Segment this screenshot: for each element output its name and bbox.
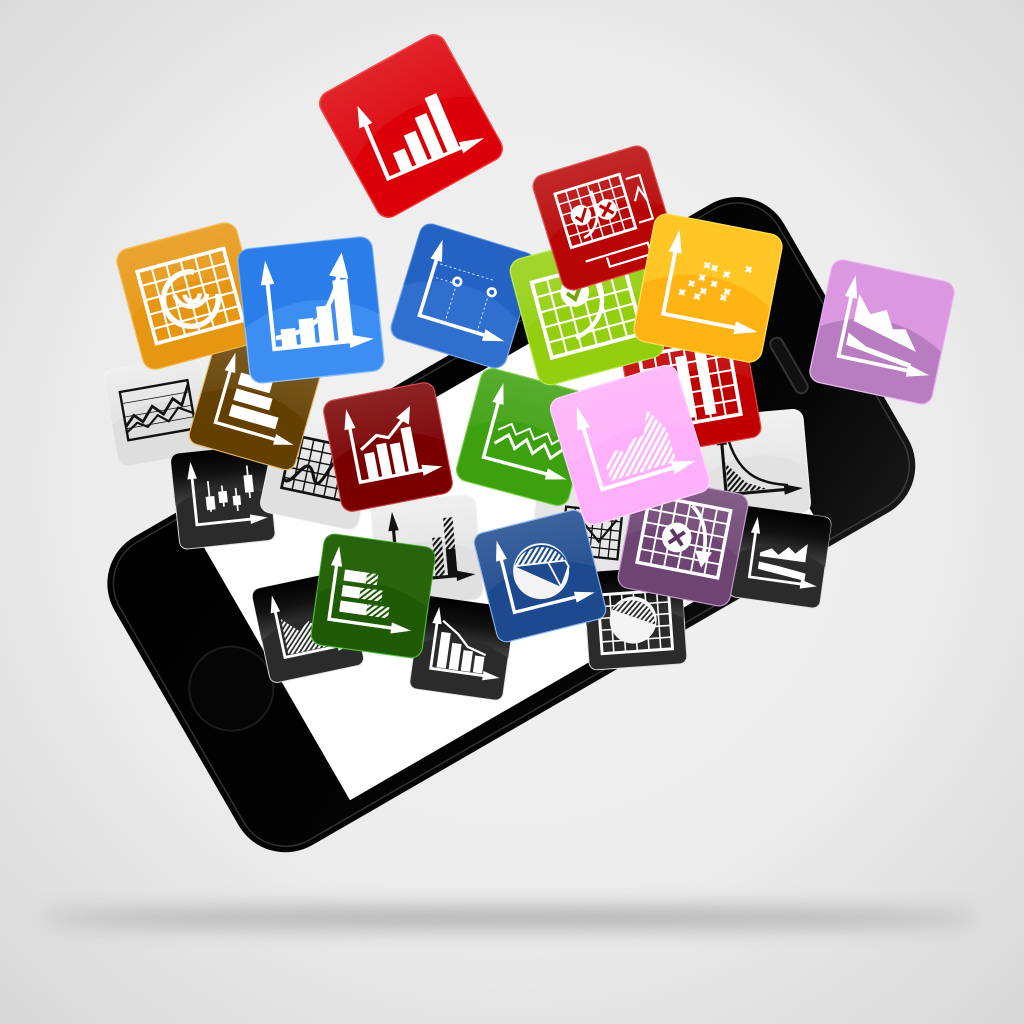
- chart: hatched area: [267, 581, 356, 663]
- phone: [88, 177, 935, 872]
- icon: white bar chart: [370, 494, 484, 608]
- chart: zigzag lines: [476, 382, 586, 485]
- chart: two area bands: [831, 274, 946, 381]
- icon: pink hatched area chart: [548, 363, 712, 527]
- chart: candlesticks: [186, 454, 268, 530]
- home button: [174, 631, 289, 746]
- chart: scatter crosses: [656, 228, 774, 338]
- chart: secondary grids: [566, 175, 663, 273]
- icon: white line chart: [102, 354, 216, 468]
- icon: blue two-point chart: [388, 221, 538, 371]
- chart: check mark on grid: [532, 258, 642, 358]
- chart: grid lines: [561, 507, 622, 559]
- chart: decay curve: [715, 420, 803, 500]
- chart: declining bars: [425, 606, 508, 683]
- icon: red bar chart top: [315, 30, 507, 222]
- phone edge highlight: [96, 185, 927, 864]
- chart: bars and curve: [258, 250, 374, 357]
- icon: white wave chart: [259, 413, 377, 531]
- chart: pie with hatched slice: [491, 521, 596, 619]
- chart: two area bands: [744, 516, 825, 591]
- icon: green zigzag chart: [454, 366, 596, 508]
- chart: horizontal bars: [209, 351, 314, 450]
- icon: blue bars and growth curve: [237, 236, 385, 384]
- chart: cross on grid: [637, 495, 731, 578]
- icon: white wave chart behind: [528, 478, 636, 586]
- icon: blue pie chart: [472, 508, 608, 644]
- icon: orange radial chart: [114, 220, 266, 372]
- icon: dark green stacked bars: [310, 533, 436, 659]
- icon: lime check chart: [507, 228, 667, 388]
- chart: grid and bars: [638, 335, 741, 430]
- icon: black candlestick chart: [170, 444, 276, 550]
- icon: violet area chart: [808, 258, 956, 406]
- ground shadow: [40, 909, 980, 927]
- chart: zigzag lines: [120, 380, 196, 440]
- chart: dotted markers: [412, 238, 528, 347]
- chart: concentric arcs on grid: [137, 249, 243, 343]
- icon: black hatched triangle chart: [251, 570, 365, 684]
- speaker slot: [768, 335, 810, 396]
- chart: pie on grid: [598, 590, 673, 654]
- icon: dark red check and cross chart: [530, 143, 680, 293]
- icon: black declining bars: [409, 595, 515, 701]
- chart: check and cross: [555, 174, 636, 248]
- icon: purple cross chart: [616, 474, 750, 608]
- icon: red bar chart behind: [618, 313, 762, 457]
- chart: hatched bars: [387, 505, 476, 587]
- chart: bars with rising arrow: [341, 393, 443, 489]
- chart: stacked horizontal bars: [323, 545, 421, 636]
- icon: white decay curve chart: [699, 409, 811, 521]
- icon: yellow scatter chart: [632, 212, 784, 364]
- chart: hatched area: [570, 378, 698, 498]
- icon: brown horizontal bars: [187, 336, 323, 472]
- icon: dark red bars and arrow: [322, 381, 454, 513]
- chart: rising bars: [351, 65, 487, 187]
- icon: black pie chart grid: [583, 566, 687, 670]
- chart: sine curve on grid: [282, 435, 356, 501]
- phone screen: [197, 263, 821, 800]
- phone body: [88, 177, 935, 872]
- icon: black area chart right: [728, 505, 832, 609]
